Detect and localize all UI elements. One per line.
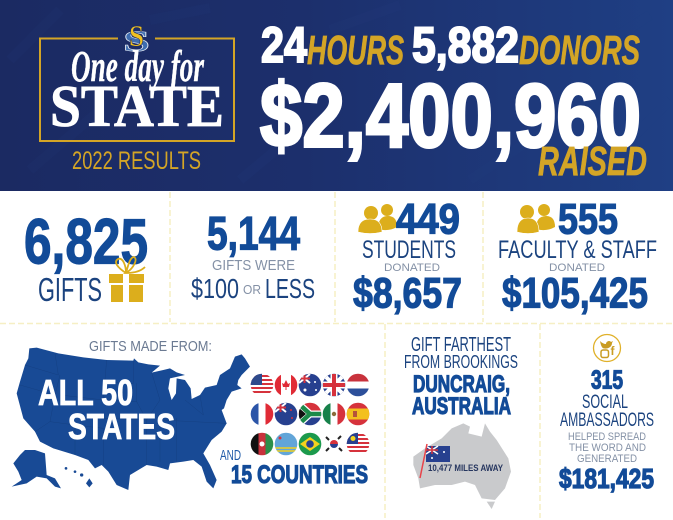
panel: social ambassadors: GENERATED bbox=[577, 453, 637, 465]
panel: total gifts: 6,825 bbox=[24, 206, 148, 278]
gold frame bbox=[40, 38, 234, 141]
panel: social ambassadors: THE WORD AND bbox=[569, 442, 646, 454]
icon: SDSU logo: S bbox=[123, 25, 150, 58]
flag: Canada bbox=[274, 374, 298, 396]
icon: people bbox=[358, 204, 397, 234]
panel: students: 449 bbox=[396, 196, 460, 244]
results subtitle: 2022 RESULTS bbox=[72, 147, 201, 175]
flag: Mexico bbox=[322, 403, 346, 425]
panel: small gifts: $100 bbox=[191, 273, 239, 304]
panel: small gifts: GIFTS WERE bbox=[212, 257, 295, 274]
script title: One day for bbox=[71, 42, 205, 91]
panel: country flags bbox=[250, 373, 370, 456]
panel: faculty and staff bbox=[498, 196, 657, 318]
panel: students: STUDENTS bbox=[362, 236, 456, 264]
flag: Brazil bbox=[298, 432, 322, 456]
panel: states map: STATES bbox=[68, 406, 175, 447]
panel: students: DONATED bbox=[384, 262, 440, 274]
panel: farthest gift: DUNCRAIG, bbox=[413, 371, 510, 398]
flag: Malaysia bbox=[346, 432, 370, 452]
panel: social ambassadors: HELPED SPREAD bbox=[568, 431, 646, 443]
flag: United Kingdom bbox=[322, 373, 346, 397]
panel: farthest gift: GIFT FARTHEST bbox=[411, 334, 511, 356]
icon: social media badge: f bbox=[610, 344, 616, 358]
icon: Australian flag bbox=[420, 444, 450, 478]
panel: faculty and staff: DONATED bbox=[549, 262, 605, 274]
distance label: 10,477 MILES AWAY bbox=[428, 463, 503, 473]
icon: SDSU logo bbox=[123, 18, 150, 58]
map label: ALL 50 bbox=[38, 372, 133, 413]
panel: farthest gift: FROM BROOKINGS bbox=[404, 352, 518, 372]
icon: social media badge bbox=[594, 334, 620, 362]
panel: students: $8,657 bbox=[353, 270, 462, 318]
panel: faculty and staff: 555 bbox=[558, 196, 618, 244]
flag: Netherlands bbox=[347, 374, 369, 396]
panel: students bbox=[353, 196, 462, 318]
header banner bbox=[0, 0, 673, 191]
panel: small gifts: LESS bbox=[265, 273, 315, 304]
countries label: AND bbox=[220, 447, 241, 464]
flag: France bbox=[250, 403, 274, 425]
panel: social ambassadors bbox=[559, 334, 654, 494]
panel: farthest gift bbox=[404, 334, 518, 509]
icon: gift box bbox=[109, 257, 145, 302]
heading: GIFTS MADE FROM: bbox=[89, 338, 212, 355]
flag: South Africa bbox=[298, 402, 322, 426]
logo block bbox=[40, 18, 234, 175]
headline stat: 24 hours: 24 bbox=[261, 17, 307, 73]
countries label: 15 COUNTRIES bbox=[231, 461, 368, 489]
panel: small gifts: 5,144 bbox=[207, 206, 300, 260]
panel: farthest gift: AUSTRALIA bbox=[412, 393, 511, 420]
map: Australia bbox=[413, 423, 511, 509]
flag: South Korea bbox=[325, 435, 343, 452]
panel: small gifts bbox=[191, 206, 315, 304]
countries label bbox=[220, 447, 368, 489]
headline stat: 24 hours bbox=[261, 17, 404, 73]
panel: total gifts: GIFTS bbox=[38, 271, 102, 308]
icon: people bbox=[517, 204, 555, 234]
headline stat: 24 hours: HOURS bbox=[307, 27, 404, 73]
panel: social ambassadors: SOCIAL bbox=[582, 392, 628, 413]
panel: small gifts: OR bbox=[243, 282, 261, 297]
flag: USA bbox=[250, 374, 274, 393]
panel: social ambassadors: $181,425 bbox=[559, 463, 654, 494]
panel: total gifts bbox=[24, 206, 148, 308]
headline stat: donors: 5,882 bbox=[412, 17, 519, 73]
flag: Australia bbox=[298, 373, 322, 397]
STATE wordmark: STATE bbox=[50, 73, 224, 139]
icon: SDSU logo: S bbox=[129, 18, 144, 53]
panel: social ambassadors: 315 bbox=[591, 364, 623, 394]
headline stat: donors bbox=[412, 17, 640, 73]
map: United States bbox=[12, 348, 250, 490]
flag: Aruba bbox=[274, 432, 298, 456]
flag: New Zealand bbox=[274, 402, 298, 426]
panel: states map bbox=[12, 338, 250, 490]
flag: Spain bbox=[346, 402, 370, 426]
flag: Afghanistan bbox=[250, 432, 274, 456]
